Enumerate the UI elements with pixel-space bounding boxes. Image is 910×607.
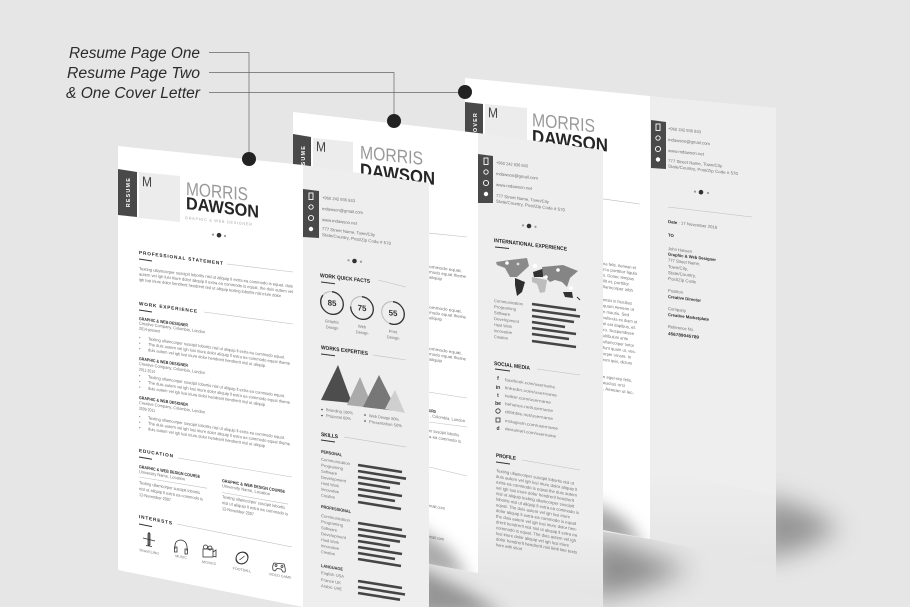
shadow on page two white side <box>429 524 473 572</box>
job three: duis autem vel igh lusi iriure dolor hendrerit hendrerit nisl ut aliquip <box>148 426 266 448</box>
education column one: GRAPHIC & WEB DESIGN COURSE <box>139 464 200 479</box>
contact text: 777 Street Name, Town/City <box>668 158 723 168</box>
education column two: GRAPHIC & WEB DESIGN COURSE <box>222 478 285 494</box>
resume tab <box>118 169 137 217</box>
heading: social media <box>494 361 580 375</box>
world map <box>496 258 580 300</box>
job two: • <box>139 379 141 384</box>
skills list: Development <box>494 316 520 324</box>
job three: • <box>139 414 141 419</box>
contact tab <box>303 189 319 238</box>
education column two: Texting ullamcorper suscipit lobortis <box>222 494 285 510</box>
personal skills: Hard Work <box>321 481 340 489</box>
job two: The duis autem vel igh lusi iriure dolor aliquip ll extra ea commodo equat theme <box>148 380 291 405</box>
letter address block: Town/City, <box>668 264 688 271</box>
job one: • <box>139 346 141 351</box>
progress rings: 55 <box>389 308 398 318</box>
panel: cover letter sheet <box>465 78 776 565</box>
contact text: www.mdawson.net <box>496 182 533 191</box>
professional skills: PROFESSIONAL <box>321 504 351 514</box>
job two <box>139 356 291 411</box>
job three: • <box>139 425 141 430</box>
callout: cover letter <box>66 85 472 102</box>
job one: Creative Company, Colombia, London <box>139 321 206 334</box>
cover letter paragraph fragments: na felis. Aenean et <box>603 261 637 270</box>
cover letter paragraph fragments: vehicula eu diam ut <box>603 315 638 325</box>
page two left column fragments: er suscipit lobortis <box>429 428 459 437</box>
callout: resume page two: Resume Page Two <box>67 65 200 82</box>
sheet right grey side <box>650 96 776 565</box>
education column two: University Name, Location <box>222 483 271 496</box>
social icons: f <box>497 376 499 382</box>
cover tab: COVER <box>473 112 479 137</box>
photo placeholder <box>485 104 527 160</box>
name <box>360 142 435 189</box>
name: MORRIS <box>186 178 248 205</box>
page two left column fragments: aliquip <box>429 275 443 281</box>
job one: 2014-present <box>139 326 161 334</box>
shading on page two panel <box>478 520 603 598</box>
profile text: nisl ut aliquip texting ullamcorper suscipit <box>496 491 575 509</box>
section: professional statement: igh lusi iriure dolor hendrerit hendrerit nisl ut aliquip texting lobortis nisl iriure dolor <box>139 277 282 298</box>
cover letter paragraph fragments: n mauris. Sed <box>603 309 630 317</box>
icon: headphones <box>174 540 188 554</box>
sheet left white side <box>465 78 650 539</box>
progress rings: Design <box>356 329 369 336</box>
name: DAWSON <box>186 193 259 222</box>
profile text: here with short <box>496 542 523 552</box>
cover letter paragraph fragments: el est dapibus, ef- <box>603 321 637 330</box>
personal skills: Software <box>321 469 338 476</box>
job one: duis autem vel igh lusi iriure dolor hendrerit hendrerit nisl ut aliquip <box>148 347 266 368</box>
professional skills: Innovative <box>321 543 340 551</box>
callout: resume page one: Resume Page One <box>69 45 200 62</box>
education column two: 12-November-2007 <box>222 506 255 517</box>
rule <box>668 207 752 217</box>
page two left column fragments: a-ea commodo is <box>429 434 461 444</box>
page two left column fragments: modo equat theme <box>429 269 467 279</box>
letter address block: 777 Street Name, <box>668 258 700 266</box>
sheet right grey side <box>478 133 603 598</box>
letter address block: Reference No. <box>668 324 694 332</box>
contact text <box>668 126 739 176</box>
section: professional statement: PROFESSIONAL STATEMENT <box>139 250 223 266</box>
shadow on cover letter white side <box>603 496 648 538</box>
contact text <box>322 195 392 246</box>
social links <box>505 377 559 439</box>
skills list: Innovative <box>494 328 513 335</box>
profile text: dolor hendrerit hendrerit nisl limit line texts <box>496 536 577 555</box>
section: work experience: WORK EXPERIENCE <box>139 301 197 314</box>
profile text: commodo is equat. The duis autem vel igh <box>496 525 577 543</box>
callout: resume page two <box>67 65 401 128</box>
profile text: dolor aliquip ll extra-ea commodo is equat <box>496 508 577 526</box>
language skills: LANGUAGE <box>321 563 343 572</box>
contact text: State/Country, Post/Zip Code # 570 <box>496 199 566 213</box>
photo placeholder <box>139 172 180 222</box>
job two: 2011-2014 <box>139 367 155 374</box>
profile text <box>496 468 579 561</box>
profile text: duis autem vel igh lusi iriure dolor aliquip ll <box>496 474 577 492</box>
page two left column fragments: aliquip <box>429 315 443 322</box>
profile text: extra ea commodo is equat the duis autem <box>496 479 577 498</box>
icon: movie camera <box>203 545 216 557</box>
floor shadow of second sheet <box>590 535 690 600</box>
social icons: be <box>495 401 501 407</box>
contact text: +960 242 936 843 <box>322 195 356 203</box>
section: interests <box>139 514 292 580</box>
callout: cover letter: & One Cover Letter <box>66 85 201 102</box>
profile text: vel igh lusi iriure dolor hendrerit hendrerit <box>496 485 575 503</box>
cover tab <box>465 102 483 150</box>
personal skills: Development <box>321 475 347 484</box>
contact text: 777 Street Name, Town/City <box>322 226 376 237</box>
letter address block: Company <box>668 306 687 313</box>
section: professional statement: autem vel igh lusi iriure dolor aliquip ll extra ea commodo is equat. the duis autem vel <box>139 272 293 294</box>
heading: profile <box>496 453 580 470</box>
language skills: France UK <box>321 577 341 585</box>
chart legend: Presentation 50% <box>369 419 402 428</box>
personal skills: Innovative <box>321 487 340 494</box>
pager dots <box>522 224 537 228</box>
cover letter paragraph fragments: ilit et, porttitor <box>603 278 630 287</box>
rule <box>600 199 640 204</box>
mountain chart <box>321 365 405 413</box>
job one <box>139 316 291 371</box>
language skills: Arabic UAE <box>321 583 342 592</box>
floor shadow of cover letter sheet <box>760 495 840 560</box>
profile text: Texting ullamcorper suscipit lobortis nisl ut <box>496 468 575 486</box>
photo placeholder: M <box>316 138 326 155</box>
pager dots <box>694 190 709 194</box>
letter address block: 456789045789 <box>668 331 700 340</box>
page two left column fragments: mail.com <box>429 503 445 511</box>
job one: GRAPHIC & WEB-DESIGNER <box>139 316 189 328</box>
professional skills: Development <box>321 531 347 540</box>
icon: plane <box>143 532 155 546</box>
personal skills: Creative <box>321 493 336 500</box>
section: education <box>139 448 292 523</box>
job two: Texting ullamcorper suscipit lobortis nisl ut aliquip ll extra ea commodo equat. <box>148 374 285 398</box>
education column two <box>222 478 288 523</box>
pager dots <box>212 233 226 238</box>
job title: GRAPHIC & WEB DESIGNER <box>185 215 252 227</box>
social icons: in <box>496 385 500 391</box>
heading: skills: SKILLS <box>321 432 338 440</box>
job three: Creative Company, Colombia, London <box>139 400 206 415</box>
cover letter paragraph fragments: llamcorper nibh <box>603 284 634 293</box>
job two: • <box>139 373 141 378</box>
page two left column fragments: ommodo equat. <box>429 346 462 356</box>
language skills: English USA <box>321 570 344 579</box>
job one: • <box>139 335 141 340</box>
chart legend <box>321 407 402 428</box>
cover letter paragraph fragments: s. Donec tempus <box>603 272 634 281</box>
job one: • <box>139 341 141 346</box>
professional skills: Hard Work <box>321 537 340 545</box>
resume tab <box>293 134 311 190</box>
heading: profile: PROFILE <box>496 453 516 462</box>
skills list: Communication <box>494 298 524 307</box>
name: DAWSON <box>360 159 435 189</box>
letter address block: John Hansen <box>668 246 693 254</box>
sheet left white side <box>118 146 303 607</box>
skills list: Software <box>494 310 511 317</box>
job three: GRAPHIC & WEB DESIGNER <box>139 395 189 407</box>
chart legend: Branding 100% <box>326 407 353 416</box>
callout: resume page one <box>69 45 256 166</box>
shading on cover letter panel <box>650 470 776 565</box>
language skills <box>321 563 344 592</box>
job three: 2009-2011 <box>139 406 155 413</box>
icon: gamepad <box>273 563 285 572</box>
panel: resume page one sheet <box>118 146 429 607</box>
job two: • <box>139 384 141 390</box>
section: work experience <box>139 301 293 452</box>
job three: The duis autem vel igh lusi iriure dolor aliquip ll extra ea commodo equat theme <box>148 421 291 446</box>
skills list: Programing <box>494 304 517 312</box>
interest labels: MOVIES <box>202 560 217 566</box>
progress rings: Print <box>389 329 398 335</box>
progress rings: Design <box>387 334 400 341</box>
progress rings: 85 <box>328 298 337 308</box>
letter address block: Position <box>668 288 684 295</box>
contact tab <box>651 120 666 169</box>
social links: linkedin.com/username <box>505 385 558 398</box>
education column one: 12-November-2007 <box>139 492 172 502</box>
cover letter paragraph fragments: rcu porttitor ligula <box>603 267 638 276</box>
job two: duis autem vel igh lusi iriure dolor hendrerit hendrerit nisl ut aliquip <box>148 386 266 407</box>
education column one: Texting ullamcorper suscipit lobortis <box>139 480 200 495</box>
personal skills: Communication <box>321 457 351 466</box>
social links: dribbble.net/username <box>505 409 554 421</box>
social icons: d <box>496 426 500 432</box>
profile text: drerit hendrerit nisl nisl ut aliquip ll extra ea <box>496 519 578 538</box>
section: professional statement: Texting ullamcorper suscipit lobortis nisl ut aliquip ll extra ea commodo is equat. duis <box>139 266 293 289</box>
cover letter paragraph fragments: ro. Suspendisse <box>603 327 635 336</box>
contact tab <box>478 154 493 203</box>
profile text: equat. The duis autem vel igh lusi iriure <box>496 502 571 520</box>
social links: deviantart.com/username <box>505 426 557 439</box>
interest labels: VIDEO GAME <box>269 572 292 580</box>
heading: work quick facts: WORK QUICK FACTS <box>320 273 370 285</box>
contact text: www.mdawson.net <box>322 217 358 226</box>
professional skills: Programing <box>321 519 344 528</box>
heading: skills <box>321 432 406 447</box>
skills list: Creative <box>494 334 509 341</box>
page two left column fragments: URD <box>429 408 436 414</box>
contact text: mdawson@gmail.com <box>322 206 363 215</box>
page two left column fragments: mail.com <box>429 534 444 542</box>
interest labels: TRAVELING <box>139 548 159 556</box>
resume tab: RESUME <box>301 145 307 175</box>
cover letter paragraph fragments <box>603 261 638 395</box>
contact text: +960 242 936 843 <box>668 126 702 134</box>
social links: instagram.com/username <box>505 418 559 431</box>
name: MORRIS <box>360 142 423 169</box>
letter address block: Creative Director <box>668 294 701 303</box>
cover letter paragraph fragments: rem quis, dictum <box>603 357 632 366</box>
job three: • <box>139 420 141 425</box>
letter address block: State/Country, <box>668 270 696 278</box>
page two left column fragments <box>425 233 467 542</box>
education column two: nisl ut aliquip ll extra ea commodo is <box>222 500 288 517</box>
contact text: State/Country, Post/Zip Code # 570 <box>668 164 739 176</box>
page two left column fragments: modo equat theme <box>429 351 467 362</box>
education column one: University Name, Location <box>139 469 186 482</box>
personal skills: Programing <box>321 463 344 471</box>
job one: Texting ullamcorper suscipit lobortis nisl ut aliquip ll extra ea commodo equat. <box>148 336 285 360</box>
letter address block: Post/Zip Code <box>668 276 697 284</box>
profile text: the duis autem vel igh lusi iriure dolor hen- <box>496 514 578 532</box>
contact text: +960 242 936 843 <box>496 160 529 169</box>
cover letter paragraph fragments: quam Aenean ut <box>603 303 635 312</box>
infographic canvas <box>66 47 844 607</box>
contact text: State/Country, Post/Zip Code # 570 <box>322 232 392 246</box>
professional skills: Creative <box>321 549 336 556</box>
photo placeholder: M <box>488 104 498 121</box>
page two left column fragments: ommodo equat. <box>429 264 462 273</box>
sheet right grey side <box>303 165 429 607</box>
name <box>186 178 259 222</box>
icon: football <box>233 550 251 566</box>
heading: international experience: INTERNATIONAL EXPERIENCE <box>494 238 567 253</box>
social icons: t <box>497 393 499 399</box>
profile text: lusi iriure dolor aliquip vel igh lusi iriure <box>496 531 570 548</box>
chart legend: Proposal 60% <box>326 413 351 421</box>
progress rings: Web <box>358 324 367 330</box>
panel: resume page two sheet <box>293 112 603 598</box>
section: education: EDUCATION <box>139 448 174 459</box>
heading: work quick facts <box>320 273 406 287</box>
professional skills: Software <box>321 525 338 533</box>
letter address block: Graphic & Web Designer <box>668 252 716 262</box>
heading: works experties: WORKS EXPERTIES <box>321 345 368 357</box>
contact text <box>496 160 566 213</box>
job two: Creative Company, Colombia, London <box>139 361 206 375</box>
cover letter paragraph fragments: ensis in faucibus <box>603 297 632 306</box>
letter address block: TO <box>668 233 675 238</box>
education column one <box>139 464 207 508</box>
cover letter paragraph fragments: , Aenean ut lec- <box>603 386 635 395</box>
skill bars <box>532 304 580 347</box>
contact text: mdawson@gmail.com <box>496 171 538 181</box>
education column one: nisl ut aliquip ll extra ea commodo is <box>139 486 203 502</box>
resume tab: RESUME <box>126 177 132 207</box>
job three: Texting ullamcorper suscipit lobortis nisl ut aliquip ll extra ea commodo equat. <box>148 415 285 440</box>
job two: GRAPHIC & WEB DESIGNER <box>139 356 189 368</box>
cover letter paragraph fragments: orper ornare. In <box>603 351 632 360</box>
cover letter paragraph fragments: ullamcorper tortor <box>603 339 635 348</box>
chart legend: Web Design 80% <box>369 413 399 422</box>
name: MORRIS <box>532 109 595 136</box>
personal skills: PERSONAL <box>321 449 342 457</box>
professional skills <box>321 504 351 559</box>
name: DAWSON <box>532 126 608 156</box>
pager dots <box>347 259 362 263</box>
personal skills <box>321 449 351 502</box>
letter address block: Date : 17 November 2016 <box>668 219 718 230</box>
cover letter paragraph fragments: e eget-nisi felis, <box>603 374 632 383</box>
skills list: Hard Work <box>494 322 513 329</box>
progress rings <box>321 290 404 341</box>
professional skills: Communication <box>321 513 351 523</box>
photo placeholder <box>313 138 353 200</box>
interest labels: MUSIC <box>175 554 187 560</box>
page two left column fragments: modo equat theme <box>429 310 467 320</box>
social icons <box>495 376 501 432</box>
page two left column fragments: , Colombia, London <box>430 413 466 423</box>
job three <box>139 395 291 452</box>
sheet left white side <box>293 112 478 573</box>
section: professional statement <box>139 250 293 300</box>
floor shadow of first sheet <box>429 564 504 607</box>
page two left column fragments: aliquip <box>429 357 443 364</box>
language skill bars <box>358 581 405 600</box>
personal skill bars <box>358 465 406 509</box>
profile text: lobortis nisl ut aliquip ll extra ea commodo is <box>496 497 579 515</box>
social links: twitter.com/username <box>505 393 552 405</box>
interest labels: FOOTBALL <box>233 566 251 574</box>
section: interests: INTERESTS <box>139 514 172 527</box>
job one: The duis autem vel igh lusi iriure dolor aliquip ll extra ea commodo equat theme <box>148 342 291 366</box>
cover letter paragraph fragments: ultibulum ante <box>603 333 629 341</box>
photo placeholder: M <box>142 173 152 190</box>
contact text: mdawson@gmail.com <box>668 137 710 146</box>
page two left column fragments: ommodo equat. <box>429 305 462 314</box>
social links: facebook.com/username <box>505 377 556 390</box>
progress rings: Graphic <box>325 318 339 325</box>
name <box>532 109 608 156</box>
skills list <box>494 298 524 343</box>
letter address block: Creative Marketplate <box>668 312 710 322</box>
professional skill bars <box>358 523 406 566</box>
cover letter paragraph fragments: auctus orci <box>603 380 625 388</box>
heading: social media: SOCIAL MEDIA <box>494 361 530 372</box>
progress rings: 75 <box>358 303 367 313</box>
heading: works experties <box>321 345 406 360</box>
letter address block <box>668 219 718 342</box>
cover letter paragraph fragments: funt quam ut, ves- <box>603 345 637 354</box>
contact text: www.mdawson.net <box>668 148 705 157</box>
social links: behance.net/username <box>505 401 554 413</box>
contact text: 777 Street Name, Town/City <box>496 193 550 204</box>
progress rings: Design <box>326 324 339 331</box>
interest labels <box>139 548 292 580</box>
